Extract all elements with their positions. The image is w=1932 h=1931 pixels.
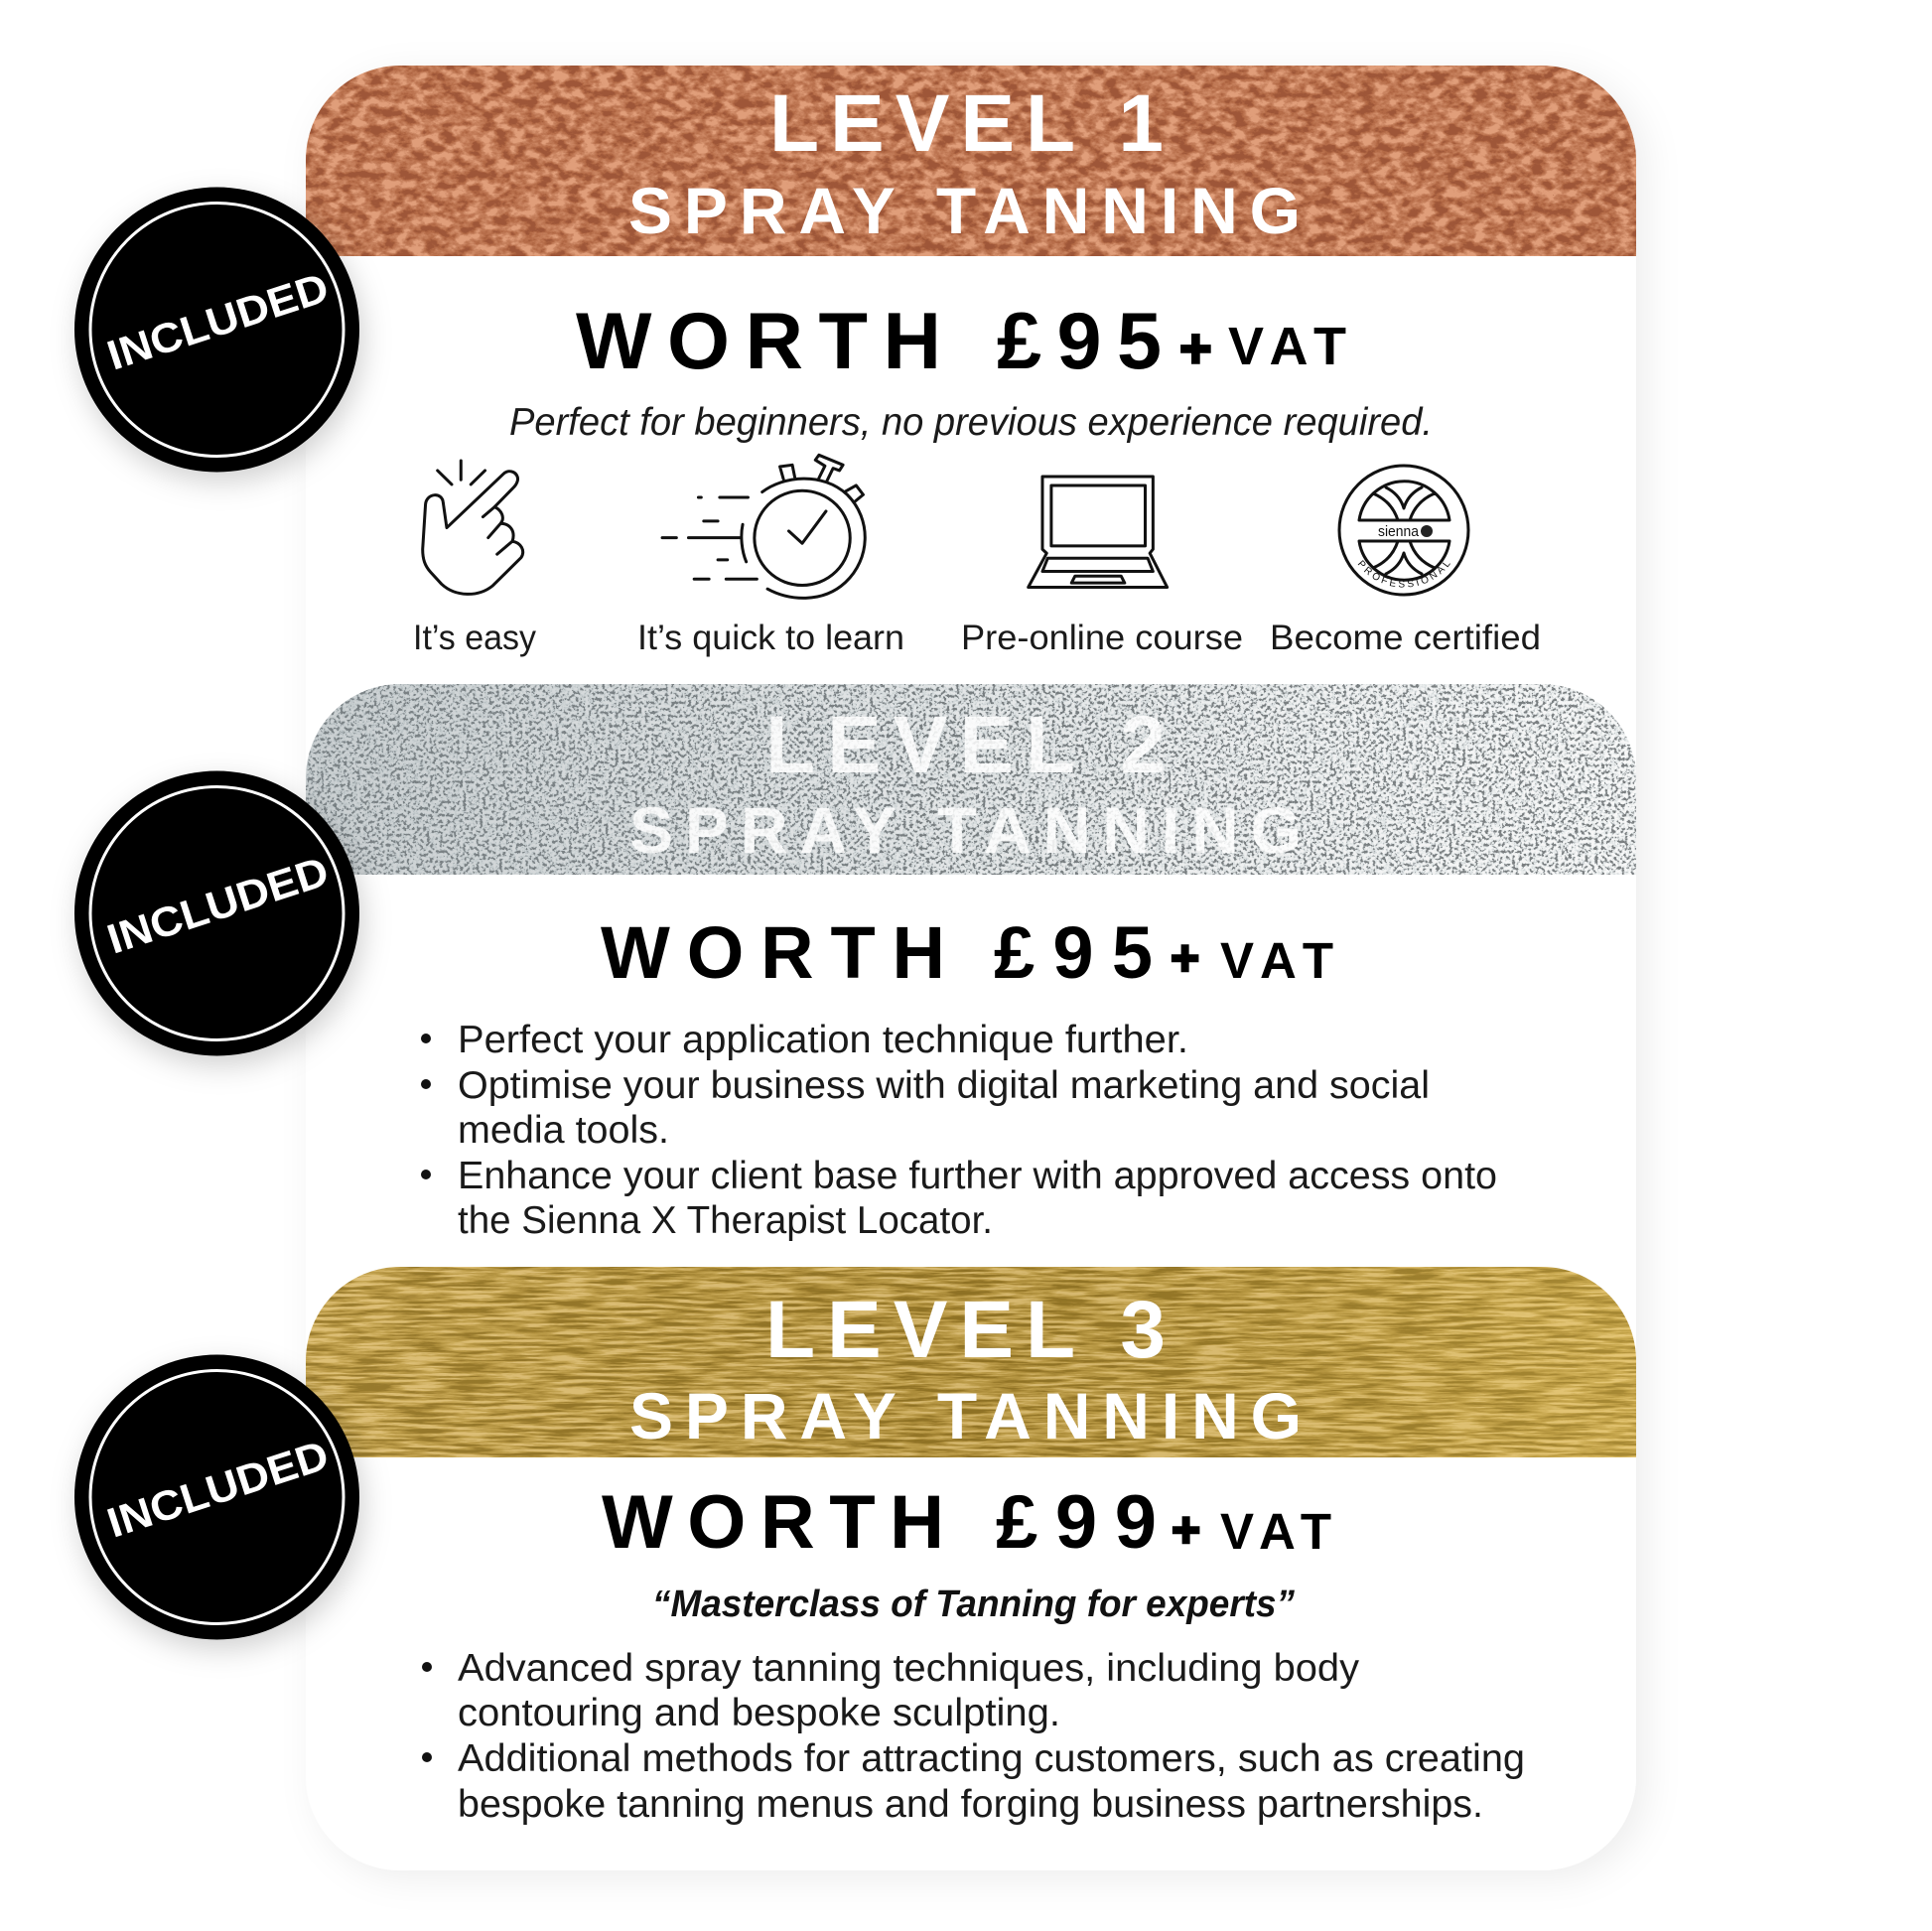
panel: level 2	[306, 684, 1636, 1242]
heading: level 3: LEVEL 3	[765, 1285, 1166, 1375]
price: worth 95 plus VAT	[601, 911, 1333, 994]
icon: laptop	[1029, 477, 1168, 588]
bullet list: Perfect your application technique further.	[458, 1019, 1188, 1061]
header band: silver	[306, 684, 1636, 875]
bullet list: contouring and bespoke sculpting.	[458, 1692, 1060, 1734]
label: its easy: It’s easy	[413, 619, 536, 657]
bullet list: Additional methods for attracting customers, such as creating	[458, 1737, 1525, 1780]
price: worth 99 plus VAT: £99	[996, 1480, 1157, 1565]
price: worth 95 plus VAT: WORTH	[601, 911, 945, 994]
panel: level 3	[306, 1267, 1636, 1826]
header band: gold	[306, 1267, 1636, 1457]
badge: included level 1: INCLUDED	[101, 263, 334, 379]
heading: spray tanning: SPRAY TANNING	[628, 174, 1301, 247]
price: worth 99 plus VAT: +	[1172, 1502, 1200, 1558]
badge: included level 2: INCLUDED	[101, 847, 334, 963]
price: worth 95 plus VAT	[576, 297, 1346, 386]
icon: finger snap hand	[423, 461, 523, 594]
bullet list	[422, 1647, 1525, 1826]
badge: included level 1	[74, 187, 359, 473]
price: worth 99 plus VAT: VAT	[1220, 1503, 1331, 1560]
price: worth 95 plus VAT: £95	[997, 297, 1162, 386]
icon: sienna professional seal: sienna	[1378, 523, 1420, 540]
heading: level 1: LEVEL 1	[769, 78, 1164, 169]
heading: spray tanning: SPRAY TANNING	[629, 793, 1302, 867]
bullet list: the Sienna X Therapist Locator.	[458, 1199, 993, 1242]
badge: included level 2	[74, 770, 359, 1056]
price: worth 99 plus VAT: WORTH	[602, 1480, 944, 1565]
heading: spray tanning: SPRAY TANNING	[629, 1379, 1302, 1452]
label: quick to learn: It’s quick to learn	[637, 619, 904, 657]
badge: included level 3	[74, 1354, 359, 1640]
bullet list: bespoke tanning menus and forging business partnerships.	[458, 1783, 1483, 1826]
heading: level 2: LEVEL 2	[765, 700, 1166, 790]
price: worth 95 plus VAT: £95	[994, 911, 1153, 994]
panel: level 1	[266, 66, 1636, 657]
bullet list: Advanced spray tanning techniques, including body	[458, 1647, 1360, 1690]
bullet list	[421, 1019, 1497, 1242]
price: worth 99 plus VAT	[602, 1480, 1331, 1565]
tagline: Perfect for beginners, no previous experience required.	[509, 401, 1433, 444]
price: worth 95 plus VAT: WORTH	[576, 297, 941, 386]
icon: sienna professional seal: PROFESSIONAL	[1358, 560, 1450, 588]
badge: included level 3: INCLUDED	[101, 1431, 334, 1547]
bullet list: media tools.	[458, 1109, 669, 1152]
price: worth 95 plus VAT: VAT	[1228, 317, 1346, 376]
price: worth 95 plus VAT: +	[1179, 317, 1212, 379]
header band: copper	[306, 66, 1636, 256]
icon: stopwatch	[662, 455, 865, 598]
bullet list: Optimise your business with digital marketing and social	[458, 1064, 1430, 1107]
tagline: masterclass: “Masterclass of Tanning for experts”	[652, 1584, 1295, 1625]
price: worth 95 plus VAT: VAT	[1220, 932, 1333, 989]
bullet list: Enhance your client base further with approved access onto	[458, 1155, 1497, 1197]
label: pre-online course: Pre-online course	[961, 619, 1243, 657]
icon: sienna professional seal	[1338, 465, 1469, 596]
label: become certified: Become certified	[1270, 619, 1541, 657]
card background	[306, 66, 1636, 1870]
price: worth 95 plus VAT: +	[1171, 930, 1199, 986]
